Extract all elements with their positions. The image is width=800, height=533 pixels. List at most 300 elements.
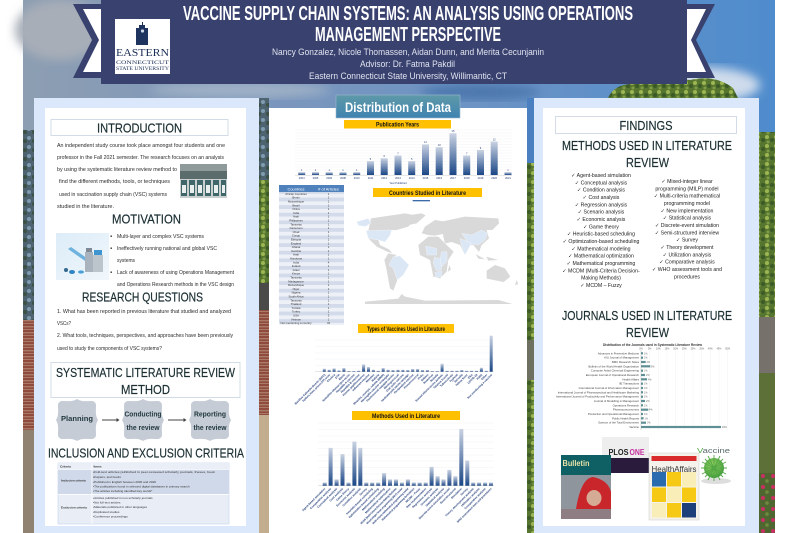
table: countries and number of articles: Tanzania: [290, 222, 302, 226]
table: countries and number of articles: England: [291, 241, 302, 245]
bar chart: types of vaccines: Pneumococcal conjugate vaccine: [365, 373, 395, 403]
bar chart: journal distribution: Computer Aided Chemical Engineering: [591, 369, 639, 373]
bar chart: types of vaccines: Pneumococcal: [403, 373, 420, 390]
table: countries and number of articles: Israel: [293, 268, 300, 272]
methods list: left column: ✓ Economic analysis: [577, 217, 626, 223]
chart title: methods used: Methods Used in Literature: [372, 413, 440, 420]
table: criteria: •The articles including identified key words*: [93, 489, 153, 493]
bar chart: methods used: Semi-structured: [439, 487, 457, 505]
bar chart: types of vaccines: Not mentioning a vaccine: [466, 373, 493, 400]
journal cover: WHO Bulletin: Bulletin: [562, 459, 590, 468]
bar chart: journal distribution: BMC Research Notes: [612, 360, 640, 364]
bar chart: journal distribution: Bulletin of the World Health Organization: [589, 364, 639, 368]
bar chart: journal distribution: 1%: [644, 413, 648, 416]
methods list: right column: ✓ Utilization analysis: [663, 252, 712, 258]
chart title: publication years: [344, 120, 451, 128]
journal cover: PLOS ONE: ONE: [630, 448, 645, 457]
heading: journals used in literature review: [562, 308, 732, 340]
bar chart: types of vaccines: Hepatitis B vaccine: [340, 373, 361, 394]
bar chart: publication years: 1: [315, 168, 317, 172]
table: countries and number of articles: 1: [328, 256, 330, 260]
chart title: countries studied: Countries Studied in Literature: [389, 190, 466, 197]
bar chart: journal distribution: 45%: [717, 348, 722, 350]
heading: research questions: RESEARCH QUESTIONS: [82, 290, 203, 304]
bar chart: publication years: 1: [507, 168, 509, 172]
table: countries and number of articles: 3: [328, 314, 330, 318]
bar chart: types of vaccines: Influenza vaccine: [351, 373, 371, 392]
bar chart: publication years: 7: [466, 152, 468, 156]
bar chart: publication years: 9: [480, 146, 482, 150]
heading: journals used in literature review: JOURNALS USED IN LITERATURE: [562, 308, 732, 323]
journal cover: PLOS ONE: PLOS: [608, 448, 629, 457]
table: criteria: •Not full-text articles: [93, 500, 121, 504]
bar chart: publication years: 5: [370, 157, 372, 161]
bar chart: methods used: Survey: [459, 487, 469, 496]
table: countries and number of articles: 1: [328, 230, 330, 234]
table: countries and number of articles: USA: [293, 314, 299, 318]
journal cover: PLOS ONE: [602, 437, 649, 473]
table: countries and number of articles: 1: [328, 302, 330, 306]
methods list: right column: programming (MILP) model: [655, 186, 719, 192]
bar chart: types of vaccines: Bacillus Calmette-Guerin (BCG): [294, 373, 326, 405]
banner ribbon: [73, 0, 715, 84]
authors and affiliation: Nancy Gonzalez, Nicole Thomassen, Aidan Dunn, and Merita Cecunjanin: [272, 47, 544, 58]
bar chart: types of vaccines: Human papillomavirus: [341, 373, 366, 397]
bar chart: methods used: WHO assessment tools and procedures: [456, 487, 493, 524]
methods list: left column: ✓ Scenario analysis: [578, 210, 625, 216]
journal cover: WHO Bulletin: [561, 455, 611, 519]
bar chart: journal distribution: 1%: [644, 370, 648, 373]
table: criteria: •Published in English between 2000 and 2020: [93, 480, 156, 484]
bar chart: methods used: Agent-based simulation: [301, 487, 326, 512]
bar chart: methods used: MCDM (Multi-Criteria Decision-Making Methods): [359, 487, 398, 525]
journal cover: Health Affairs: HealthAffairs: [652, 464, 696, 474]
table: countries and number of articles: Ghana: [292, 245, 301, 249]
process: planning: [56, 399, 98, 441]
bar chart: types of vaccines: COVID-19: [466, 373, 479, 385]
bar chart: journal distribution: Science of the Total Environment: [598, 421, 639, 425]
research questions text: used to study the components of VSC systems?: [57, 346, 162, 352]
introduction text: used in vaccination supply chain (VSC) systems: [59, 192, 167, 198]
bar chart: publication years: Year Published: [389, 181, 407, 185]
bar chart: methods used: Discrete-event simulation model: [418, 487, 451, 520]
bar chart: journal distribution: 5%: [648, 348, 652, 350]
table: countries and number of articles: Haiti: [293, 253, 299, 257]
methods list: right column: ✓ Statistical analysis: [663, 216, 711, 222]
bar chart: types of vaccines: Oral polio vaccine: [385, 373, 405, 393]
table: countries and number of articles: 1: [328, 272, 330, 276]
heading: introduction: INTRODUCTION: [97, 120, 182, 136]
table: countries and number of articles: China: [292, 207, 300, 211]
bar chart: methods used: Scenario analysis: [420, 487, 439, 506]
bar chart: types of vaccines: Rabies: [420, 373, 430, 382]
methods list: left column: ✓ Mathematical optimization: [568, 254, 634, 260]
process: conducting the review: [122, 399, 164, 441]
bar chart: types of vaccines: Polio: [417, 373, 425, 381]
table: countries and number of articles: 1: [328, 298, 330, 302]
motivation bullets: Ineffectively running national and global VSC: [117, 246, 217, 252]
bar chart: publication years: 2005: [313, 176, 319, 180]
bar chart: publication years: 10: [438, 143, 441, 147]
research questions text: VSCs?: [57, 321, 71, 327]
bar chart: journal distribution: 1%: [644, 383, 648, 386]
table: countries and number of articles: 1: [328, 215, 330, 219]
bar chart: journal distribution: International Journal of Pharmaceutical and Healthcare Marketing: [558, 390, 639, 394]
bar chart: publication years: 2015: [423, 176, 429, 180]
bar chart: publication years: 15: [452, 129, 455, 133]
bar chart: journal distribution: 1%: [644, 396, 648, 399]
bar chart: journal distribution: 25%: [682, 348, 688, 350]
bar chart: journal distribution: 50%: [725, 348, 731, 350]
table: countries and number of articles: Gambia: [291, 249, 301, 253]
bar chart: types of vaccines: Typhoid: [448, 373, 459, 383]
heading: inclusion and exclusion criteria: INCLUSION AND EXCLUSION CRITERIA: [48, 446, 244, 460]
table: countries and number of articles: Vietnam: [291, 317, 302, 321]
methods list: left column: [562, 173, 640, 289]
bar chart: journal distribution: 5%: [651, 365, 655, 368]
table: countries and number of articles: Niger: [293, 287, 299, 291]
bar chart: methods used: New implementation: [405, 487, 427, 509]
process: reporting the review: [189, 399, 231, 441]
bar chart: publication years: 2020: [491, 176, 498, 180]
bar chart: publication years: 2012: [381, 176, 388, 180]
methods list: right column: ✓ Semi-structured interview: [655, 230, 719, 236]
image: rows of vaccine vials: [180, 164, 227, 198]
table: countries and number of articles: Thailand: [291, 302, 302, 306]
bar chart: publication years: 1: [356, 168, 358, 172]
bar chart: types of vaccines: Seasonal influenza vaccine, pandemic: [414, 373, 444, 403]
bar chart: types of vaccines: Rotavirus: [422, 373, 435, 385]
bar chart: methods used: Economic analysis: [335, 487, 356, 508]
bar chart: types of vaccines: Malaria: [371, 373, 381, 383]
bar chart: publication years: 2010: [354, 176, 360, 180]
bar chart: types of vaccines: H1N1: [475, 373, 484, 381]
table: criteria: •Conference proceedings: [93, 514, 128, 518]
methods list: left column: ✓ Regression analysis: [575, 202, 628, 208]
bar chart: journal distribution: 2%: [646, 374, 650, 377]
bar chart: journal distribution: 3%: [646, 361, 651, 364]
chart title: publication years: Publication Years: [376, 122, 419, 128]
heading: distribution of data: [336, 95, 460, 118]
methods list: left column: ✓ Mathematical modeling: [571, 246, 631, 252]
bar chart: methods used: Comparative analysis: [463, 487, 487, 510]
heading: journals used in literature review: REVIEW: [626, 325, 670, 340]
bar chart: publication years: 11: [424, 140, 427, 144]
table: countries and number of articles: 1: [328, 294, 330, 298]
bar chart: journal distribution: Health Affairs: [622, 377, 640, 381]
table: criteria: •The publications found in selected digital databases in primary search: [93, 484, 190, 488]
table: countries and number of articles: 1: [328, 211, 330, 215]
bar chart: types of vaccines: DTP: [334, 373, 341, 380]
bar chart: publication years: 2017: [450, 176, 456, 180]
table: countries and number of articles: Countries: [287, 186, 305, 191]
methods list: left column: ✓ Heuristic-based scheduling: [567, 232, 635, 238]
bar chart: publication years: 2006: [326, 176, 333, 180]
bar chart: methods used: Mathematical programming formulation: [381, 487, 415, 522]
table: countries and number of articles: 1: [328, 283, 330, 287]
table: countries and number of articles: 1: [328, 291, 330, 295]
process: reporting the review: Reporting: [194, 410, 226, 418]
methods list: right column: ✓ Discrete-event simulation: [655, 223, 719, 229]
table: countries and number of articles: Philippines: [289, 218, 303, 222]
table: countries and number of articles: Honduras: [290, 256, 303, 260]
introduction text: professor in the Fall 2021 semester. The research focuses on an analysis: [57, 155, 224, 161]
bar chart: journal distribution: 30%: [691, 348, 696, 350]
bar chart: types of vaccines: Varicella: [453, 373, 464, 384]
methods list: right column: ✓ Survey: [676, 238, 698, 244]
methods list: left column: ✓ Game theory: [583, 224, 619, 230]
bar chart: methods used: Heuristic-based scheduling: [345, 487, 374, 516]
journal cover: Vaccine: Vaccine: [697, 448, 730, 455]
bar chart: journal distribution: Distribution of the Journals used in Systematic Literature Review: [603, 343, 702, 347]
bar chart: journal distribution: 1%: [644, 391, 648, 394]
bar chart: types of vaccines: Other: [480, 372, 489, 381]
table: countries and number of articles: 1: [328, 203, 330, 207]
motivation bullets: [110, 234, 234, 288]
table: countries and number of articles: Haiti: [293, 215, 299, 219]
table: criteria: •Articles published in non-scholarly journals: [93, 496, 153, 500]
table: countries and number of articles: Brazil: [292, 203, 300, 207]
methods list: right column: ✓ Mixed-integer linear: [661, 179, 713, 185]
bar chart: journal distribution: IIE Transactions: [619, 382, 640, 386]
table: criteria: Inclusion criteria: [61, 478, 86, 482]
methods list: right column: ✓ New implementation: [661, 208, 714, 214]
bar chart: types of vaccines: Ebola: [338, 373, 346, 381]
table: countries and number of articles: Nigeria: [292, 291, 301, 295]
bar chart: journal distribution: 46%: [722, 426, 728, 429]
table: countries and number of articles: India: [293, 211, 299, 215]
table: countries and number of articles: Congo: [292, 234, 301, 238]
methods list: right column: programming model: [664, 201, 710, 207]
bar chart: methods used: Mixed-integer linear programming (MILP) model: [365, 487, 404, 525]
logo: Eastern Connecticut State University: STATE UNIVERSITY: [116, 67, 169, 72]
bar chart: publication years: 5: [411, 157, 413, 161]
authors and affiliation: Eastern Connecticut State University, Willimantic, CT: [309, 71, 507, 82]
methods list: left column: ✓ Conceptual analysis: [575, 180, 628, 186]
table: countries and number of articles: 1: [328, 241, 330, 245]
table: countries and number of articles: Turkey: [292, 310, 301, 314]
process: conducting the review: Conducting: [124, 410, 162, 418]
table: countries and number of articles: 1: [328, 196, 330, 200]
heading: systematic literature review method: SYSTEMATIC LITERATURE REVIEW: [56, 365, 236, 380]
heading: motivation: MOTIVATION: [112, 212, 181, 226]
table: countries and number of articles: Madagascar: [288, 279, 304, 283]
bar chart: journal distribution: Pharmacoeconomics: [613, 408, 640, 412]
table: countries and number of articles: Ethiopia: [291, 238, 301, 242]
bar chart: publication years: 2018: [464, 176, 470, 180]
methods list: right column: [652, 179, 722, 280]
motivation bullets: Multi-layer and complex VSC systems: [117, 234, 204, 240]
bar chart: types of vaccines: Yellow fever: [454, 372, 469, 387]
table: countries and number of articles: Mozambique: [288, 200, 304, 204]
bar chart: methods used: MCDM – Fuzzy: [405, 487, 422, 504]
table: countries and number of articles: [279, 185, 344, 325]
heading: methods used in literature review: METHODS USED IN LITERATURE: [562, 138, 732, 153]
heading: distribution of data: Distribution of Data: [345, 99, 451, 115]
methods list: left column: ✓ Condition analysis: [577, 188, 625, 194]
bar chart: methods used: Conceptual analysis: [316, 487, 338, 509]
introduction text: [57, 143, 225, 210]
methods list: right column: ✓ Multi-criteria mathematical: [654, 194, 720, 200]
journal cover: Vaccine: [697, 448, 731, 484]
table: countries and number of articles: 1: [328, 264, 330, 268]
bar chart: journal distribution: 0%: [639, 348, 644, 350]
methods list: right column: ✓ Comparative analysis: [659, 260, 715, 266]
bar chart: methods used: Condition analysis: [341, 487, 362, 507]
bar chart: journal distribution: 1%: [644, 417, 649, 420]
world map: countries studied: [357, 200, 518, 304]
bar chart: publication years: 2013: [395, 176, 401, 180]
bar chart: types of vaccines: [294, 336, 494, 406]
methods list: left column: ✓ Cost analysis: [583, 195, 620, 201]
bar chart: journal distribution: 1%: [644, 352, 648, 355]
bar chart: journal distribution: 1%: [644, 404, 648, 407]
methods list: right column: procedures: [674, 274, 700, 280]
bar chart: methods used: Utilization analysis: [460, 487, 481, 508]
bar chart: types of vaccines: Rubella: [429, 373, 439, 383]
table: countries and number of articles: 34: [327, 321, 330, 325]
methods list: left column: ✓ Optimization-based scheduling: [563, 239, 639, 245]
bar chart: publication years: 2014: [409, 176, 415, 180]
table: countries and number of articles: Cameroon: [289, 226, 303, 230]
bar chart: publication years: [295, 129, 512, 185]
bar chart: journal distribution: 1%: [644, 387, 648, 390]
bar chart: journal distribution: 15%: [665, 348, 670, 350]
table: countries and number of articles: 1: [328, 222, 330, 226]
process: planning: Planning: [61, 414, 93, 423]
authors and affiliation: Advisor: Dr. Fatma Pakdil: [360, 59, 455, 70]
table: countries and number of articles: 1: [328, 276, 330, 280]
bar chart: publication years: 1: [342, 168, 344, 172]
table: countries and number of articles: 1: [328, 268, 330, 272]
bar chart: journal distribution: AIU Journal of Management: [604, 356, 639, 360]
bar chart: types of vaccines: Tuberculosis: [439, 373, 454, 388]
bar chart: journal distribution: Advances in Preventive Medicine: [598, 351, 639, 355]
bar chart: methods used: Multi-criteria mathematical programming model: [371, 487, 410, 525]
bar chart: publication years: 6: [383, 154, 385, 158]
table: criteria: •Materials published in other languages: [93, 505, 148, 509]
table: criteria: •Full-text articles published in peer-reviewed scholarly journals, theses, book: [93, 470, 216, 474]
research questions text: [57, 309, 233, 352]
research questions text: 2. What tools, techniques, perspectives, and approaches have been previously: [57, 333, 233, 339]
table: criteria: •Duplicated studies: [93, 510, 120, 514]
table: countries and number of articles: 1: [328, 234, 330, 238]
table: countries and number of articles: 1: [328, 306, 330, 310]
process: conducting the review: the review: [126, 423, 160, 432]
bar chart: publication years: 2004: [299, 176, 305, 180]
table: countries and number of articles: 1: [328, 218, 330, 222]
table: countries and number of articles: Not mentioning a country: [280, 321, 312, 325]
bar chart: journal distribution: [556, 343, 731, 430]
table: countries and number of articles: 1: [328, 192, 330, 196]
bar chart: journal distribution: Vaccine: [629, 425, 639, 429]
table: criteria: Exclusion criteria: [61, 506, 87, 510]
bar chart: methods used: [301, 423, 494, 525]
logo: Eastern Connecticut State University: [115, 19, 170, 74]
bar chart: journal distribution: 20%: [673, 348, 679, 350]
methods list: left column: ✓ MCDM (Multi-Criteria Decision-: [562, 268, 640, 274]
table: countries and number of articles: Kenya: [292, 272, 300, 276]
table: criteria: Items: [94, 464, 102, 468]
panel: left column: [34, 98, 259, 533]
bar chart: journal distribution: Journal of Modelling in Management: [594, 399, 639, 403]
bar chart: types of vaccines: Hepatitis A vaccine: [335, 373, 356, 394]
bar chart: journal distribution: 35%: [699, 348, 705, 350]
table: countries and number of articles: # of Articles: [318, 186, 339, 191]
table: countries and number of articles: 1: [328, 310, 330, 314]
table: countries and number of articles: 1: [328, 245, 330, 249]
bar chart: publication years: 1: [328, 168, 330, 172]
introduction text: studied in the literature.: [57, 204, 114, 210]
bar chart: journal distribution: European Journal of Operational Research: [586, 373, 639, 377]
table: countries and number of articles: African Countries: [285, 192, 307, 196]
table: countries and number of articles: Chad: [293, 230, 300, 234]
bar chart: journal distribution: Production and Operational Management: [588, 412, 639, 416]
introduction text: find the different methods, tools, or techniques: [59, 179, 170, 185]
chart title: countries studied: [373, 188, 482, 197]
bar chart: journal distribution: 2%: [646, 400, 650, 403]
bar chart: journal distribution: 4%: [648, 378, 652, 381]
methods list: left column: ✓ MCDM – Fuzzy: [580, 283, 622, 289]
table: countries and number of articles: 1: [328, 253, 330, 257]
bar chart: publication years: 1: [301, 168, 303, 172]
bar chart: methods used: Theory development analysis: [444, 487, 475, 517]
bar chart: methods used: Statistical analysis: [424, 487, 445, 507]
table: countries and number of articles: 1: [328, 287, 330, 291]
methods list: left column: Making Methods): [581, 276, 621, 282]
bar chart: types of vaccines: Meningitis vaccine conjugate: [360, 373, 390, 403]
research questions text: 1. What has been reported in previous literature that studied and analyzed: [57, 309, 231, 315]
methods list: left column: ✓ Agent-based simulation: [571, 173, 631, 179]
heading: findings: FINDINGS: [620, 118, 673, 133]
table: countries and number of articles: 1: [328, 200, 330, 204]
heading: findings: [556, 116, 736, 134]
motivation bullets: Lack of awareness of using Operations Management: [117, 270, 234, 276]
heading: systematic literature review method: METHOD: [121, 382, 170, 397]
table: criteria: chapters, and books: [93, 475, 121, 479]
table: countries and number of articles: 1: [328, 226, 330, 230]
bar chart: methods used: Game theory: [335, 487, 350, 502]
heading: systematic literature review method: [51, 362, 240, 398]
bar chart: methods used: Survey: [358, 487, 368, 496]
bar chart: journal distribution: 10%: [656, 348, 662, 350]
title: MANAGEMENT PERSPECTIVE: [315, 24, 501, 46]
table: countries and number of articles: South Africa: [288, 294, 304, 298]
table: countries and number of articles: 1: [328, 249, 330, 253]
bar chart: types of vaccines: Zika: [467, 373, 474, 380]
methods list: right column: ✓ WHO assessment tools and: [652, 267, 722, 273]
bar chart: types of vaccines: Haemophilus influenzae type b vaccine: [321, 373, 351, 403]
methods list: right column: ✓ Theory development: [661, 245, 714, 251]
bar chart: publication years: 2008: [340, 176, 346, 180]
table: criteria: [58, 463, 229, 524]
chart title: types of vaccines: [358, 324, 454, 333]
table: countries and number of articles: Benin: [292, 196, 300, 200]
bar chart: types of vaccines: Cholera: [326, 373, 336, 383]
bar chart: publication years: 2019: [478, 176, 484, 180]
bar chart: methods used: Optimization-based scheduling: [348, 487, 380, 519]
table: countries and number of articles: Tanzania: [290, 276, 302, 280]
bar chart: types of vaccines: Measles: [365, 373, 376, 383]
table: countries and number of articles: Tanzania: [290, 298, 302, 302]
bar chart: journal distribution: Operations Research: [613, 403, 639, 407]
bar chart: journal distribution: 3%: [647, 422, 651, 425]
bar chart: types of vaccines: Tetanus toxoid: [432, 373, 449, 390]
bar chart: journal distribution: International Journal of Information Management: [579, 386, 639, 390]
bar chart: methods used: Simulation: [450, 487, 463, 500]
bar chart: types of vaccines: Diphtheria, tetanus, pertussis (DTP) vaccine: [301, 373, 331, 403]
bar chart: journal distribution: 1%: [644, 357, 648, 360]
